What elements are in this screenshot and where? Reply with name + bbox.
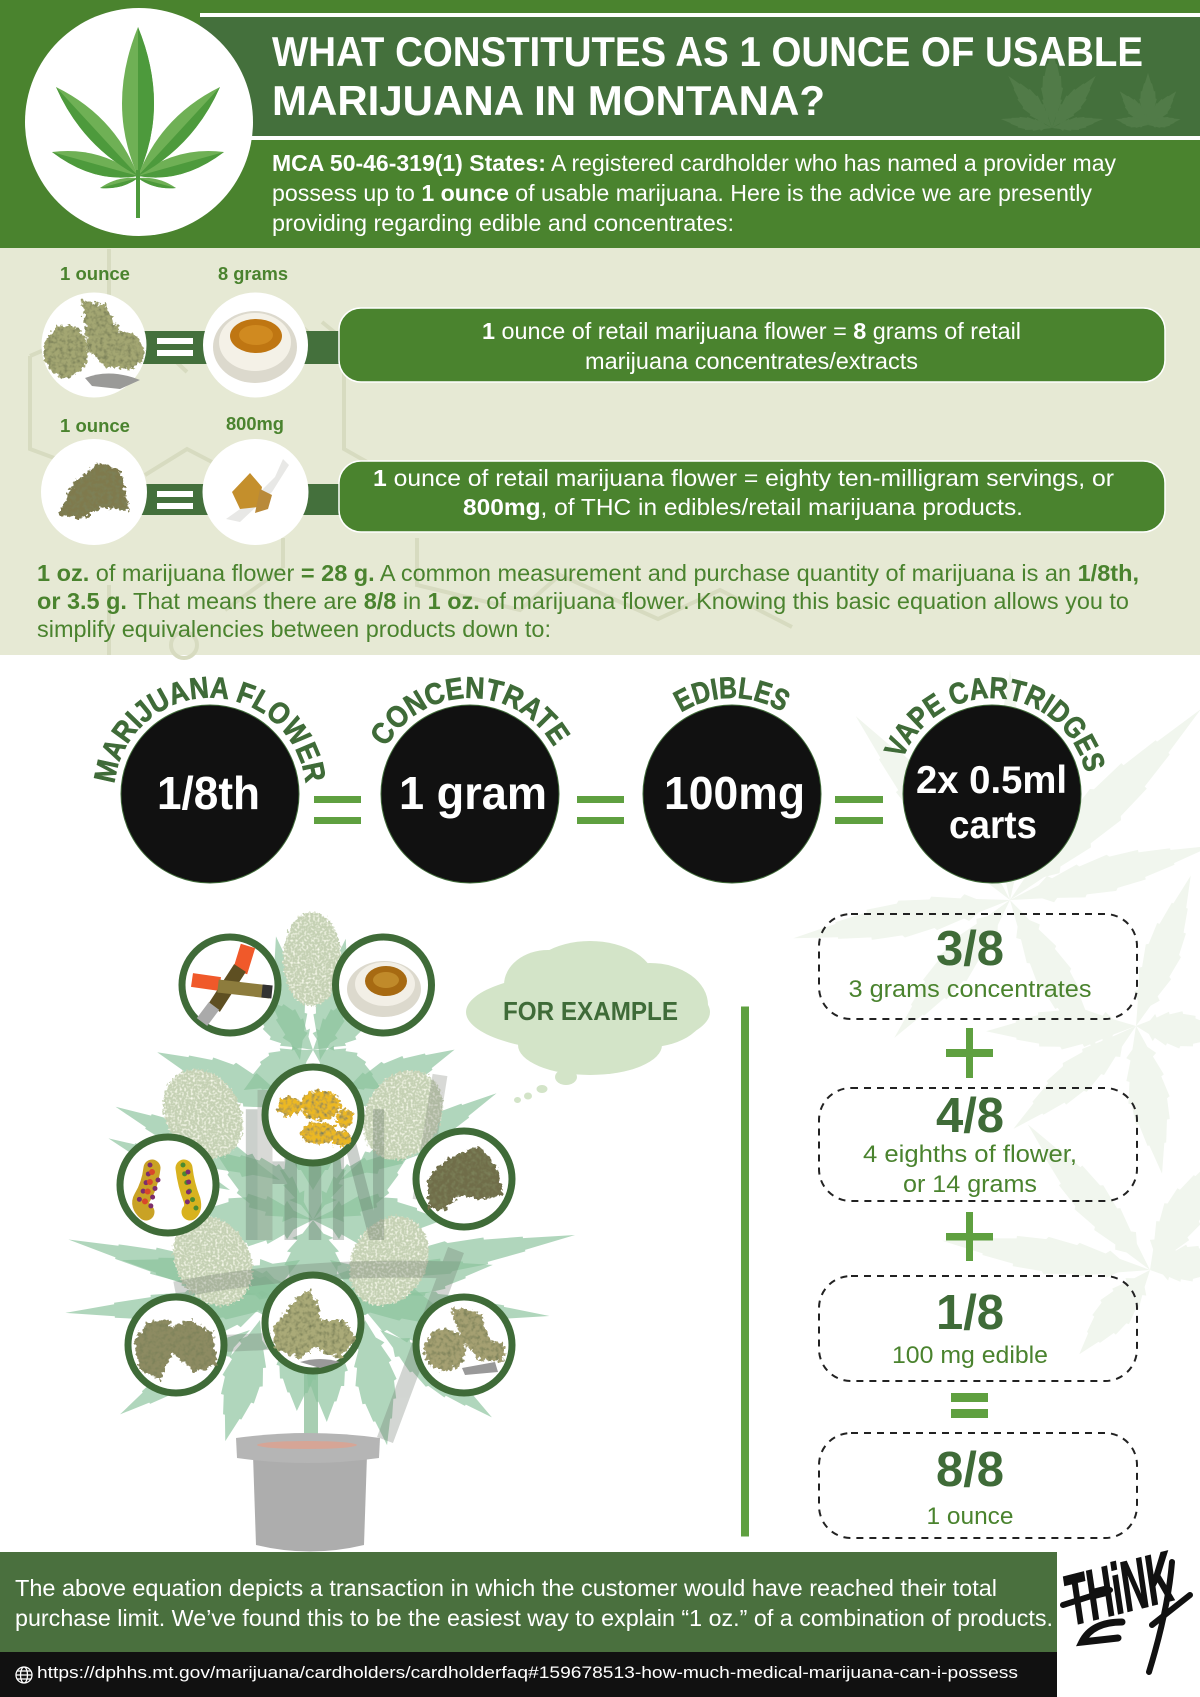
plant logo watermark: [175, 1069, 456, 1440]
title: MARIJUANA IN MONTANA?: [272, 77, 825, 124]
circle: edibles: EDIBLES: [672, 677, 790, 712]
box: 8/8: 1 ounce: [926, 1503, 1014, 1530]
intro text: possess up to 1 ounce of usable marijuana. Here is the advice we are presently: [272, 180, 1092, 206]
panel: source url bar: [0, 1652, 1057, 1697]
photo: flower: [41, 439, 147, 545]
thought cloud: for example: FOR EXAMPLE: [503, 996, 678, 1026]
circle: vape cartridges: carts: [949, 804, 1037, 847]
product photo: flower bud right: [416, 1297, 512, 1393]
panel: footer note: The above equation depicts a transaction in which the customer would have reached their total: [15, 1575, 997, 1601]
product photo: flower bud left: [128, 1297, 224, 1393]
plant leaves: [64, 933, 578, 1449]
photo: flower: [42, 292, 146, 398]
panel: equivalency section: [0, 248, 1200, 658]
box: 1/8: 100 mg edible: [892, 1342, 1048, 1369]
panel: header: [0, 0, 1200, 248]
callout: edibles: 800mg, of THC in edibles/retail marijuana products.: [463, 494, 1023, 520]
intro text: MCA 50-46-319(1) States: A registered cardholder who has named a provider may: [272, 150, 1116, 176]
equals sign: [577, 796, 624, 824]
logo: think: [1057, 1538, 1190, 1672]
panel: footer note: [0, 1552, 1057, 1652]
circle: marijuana flower: 1/8th: [157, 767, 260, 819]
icon: white circle with cannabis leaf: [25, 8, 253, 236]
callout: edibles: [339, 461, 1165, 532]
intro text: providing regarding edible and concentrates:: [272, 210, 734, 236]
icon: header watermark leaves: [1000, 48, 1182, 134]
background watermark leaves: [790, 670, 1200, 1366]
panel: footer note: purchase limit. We’ve found this to be the easiest way to explain “1 oz.” of a combination of products.: [15, 1605, 1053, 1631]
box: 4/8: 4/8: [936, 1089, 1004, 1143]
vertical divider bar: [741, 1006, 749, 1536]
title: [272, 28, 1143, 124]
box: 4/8: 4 eighths of flower,: [863, 1141, 1077, 1168]
circle: concentrate: CONCENTRATE: [372, 676, 571, 746]
box: 8/8: 8/8: [936, 1443, 1004, 1497]
illustration: potted plant with products: [64, 912, 578, 1552]
callout: concentrates: marijuana concentrates/extracts: [585, 348, 918, 374]
circle: edibles: [642, 677, 822, 884]
box: 8/8: [819, 1433, 1137, 1538]
product photo: purple flower: [416, 1131, 512, 1227]
panel: equation circles: [94, 676, 1104, 884]
product photo: flower bud centre: [265, 1275, 361, 1371]
icon: equals: [157, 338, 193, 356]
equals sign: [314, 796, 361, 824]
thought cloud: for example: [466, 941, 710, 1103]
photo: concentrate jar: [203, 292, 308, 398]
circle: concentrate: [372, 676, 571, 884]
connector bar: [140, 484, 340, 515]
plus sign: [946, 1212, 993, 1261]
plant stem: [304, 1370, 318, 1445]
product photo: candy: [120, 1137, 216, 1233]
icon: globe: [16, 1667, 32, 1683]
connector bar: [140, 331, 340, 364]
callout: concentrates: [339, 308, 1165, 382]
box: 1/8: [819, 1276, 1137, 1381]
flower pot: [236, 1433, 380, 1552]
row: 1 ounce equals 800mg: [41, 414, 1165, 545]
label: 8 grams: 8 grams: [218, 264, 288, 284]
row: 1 ounce equals 8 grams: [42, 264, 1165, 398]
explanatory paragraph: simplify equivalencies between products down to:: [37, 616, 551, 642]
photo: wrapped caramel: [202, 439, 308, 545]
circle: marijuana flower: MARIJUANA FLOWER: [94, 676, 325, 784]
circle: vape cartridges: [883, 676, 1104, 884]
callout: edibles: 1 ounce of retail marijuana flower = eighty ten-milligram servings, or: [373, 465, 1114, 491]
box: 1/8: 1/8: [936, 1286, 1004, 1340]
label: 800mg: 800mg: [226, 414, 284, 434]
box: 3/8: 3/8: [936, 922, 1004, 976]
panel: source url bar: https://dphhs.mt.gov/marijuana/cardholders/cardholderfaq#159678513-how-much-medical-marijuana-can-i-possess: [37, 1663, 1018, 1682]
product photo: concentrate jar: [336, 937, 432, 1033]
explanatory paragraph: 1 oz. of marijuana flower = 28 g. A common measurement and purchase quantity of marijuana is an 1/8th,: [37, 560, 1139, 586]
plant buds: [147, 912, 459, 1320]
label: 1 ounce: 1 ounce: [60, 416, 130, 436]
equals sign: [835, 796, 883, 824]
intro text: [272, 150, 1116, 236]
icon: equals: [157, 491, 193, 509]
explanatory paragraph: or 3.5 g. That means there are 8/8 in 1 oz. of marijuana flower. Knowing this basic equation allows you to: [37, 588, 1129, 614]
panel: fraction equation: [819, 914, 1137, 1538]
box: 3/8: [819, 914, 1137, 1019]
circle: edibles: 100mg: [664, 767, 805, 819]
product photo: wax: [265, 1067, 361, 1163]
circle: vape cartridges: 2x 0.5ml: [916, 759, 1067, 802]
plus sign: [946, 1028, 993, 1078]
box: 4/8: [819, 1088, 1137, 1201]
circle: marijuana flower: [94, 676, 325, 884]
title band: [200, 17, 1200, 136]
explanatory paragraph: [37, 560, 1139, 642]
circle: concentrate: 1 gram: [399, 767, 547, 819]
title: WHAT CONSTITUTES AS 1 OUNCE OF USABLE: [272, 28, 1143, 75]
plant logo watermark: HIN: [240, 1069, 390, 1281]
label: 1 ounce: 1 ounce: [60, 264, 130, 284]
circle: vape cartridges: VAPE CARTRIDGES: [883, 676, 1104, 772]
callout: concentrates: 1 ounce of retail marijuana flower = 8 grams of retail: [482, 318, 1021, 344]
product photo: vape cartridges: [182, 937, 278, 1033]
equals sign: [951, 1393, 988, 1418]
box: 3/8: 3 grams concentrates: [848, 976, 1092, 1003]
box: 4/8: or 14 grams: [903, 1171, 1037, 1198]
